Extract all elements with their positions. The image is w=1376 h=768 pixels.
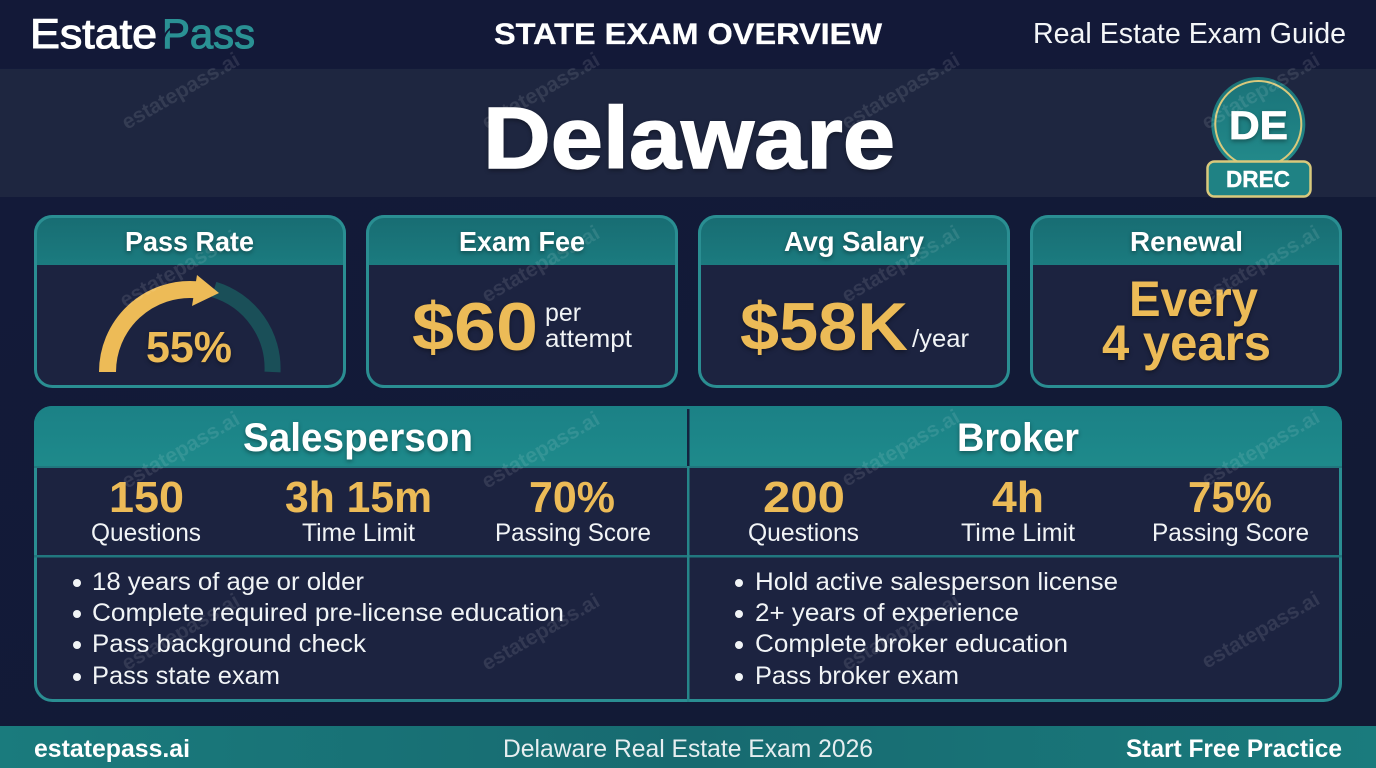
stat: time limit: 4h — [992, 473, 1044, 522]
stat: questions: 150 — [109, 473, 184, 522]
logo: EstatePass: Estate — [30, 10, 157, 57]
header title: STATE EXAM OVERVIEW — [494, 18, 883, 51]
card heading: Pass Rate — [125, 226, 254, 257]
column heading: Salesperson — [243, 416, 473, 460]
watermarks — [116, 48, 1324, 675]
renewal value: Every — [1129, 271, 1258, 327]
state badge: DE — [1229, 104, 1288, 148]
stat: time limit: Time Limit — [302, 519, 415, 547]
stat: passing score: Passing Score — [1152, 519, 1309, 547]
fee unit — [545, 299, 632, 353]
state badge — [1208, 77, 1310, 196]
watermarks: estatepass.ai — [1198, 48, 1324, 134]
watermarks: estatepass.ai — [478, 221, 604, 307]
watermarks: estatepass.ai — [838, 405, 964, 491]
card: Pass Rate — [34, 215, 346, 388]
comparison panel — [34, 406, 1342, 702]
watermarks: estatepass.ai — [838, 48, 964, 134]
stat: time limit: Time Limit — [961, 519, 1075, 547]
stat: passing score: Passing Score — [495, 519, 651, 547]
stat: questions: 200 — [763, 473, 845, 522]
stat: time limit — [961, 473, 1075, 547]
gauge value: 55% — [146, 323, 232, 372]
requirements list: Pass background check — [92, 630, 367, 658]
requirements list: Complete required pre-license education — [92, 599, 564, 627]
header bar — [0, 0, 1376, 68]
gauge: 55 percent arrow — [108, 275, 273, 372]
requirements list: Pass state exam — [92, 662, 280, 690]
state title: Delaware — [483, 90, 895, 187]
card heading: Avg Salary — [784, 226, 924, 257]
requirements list: 2+ years of experience — [755, 599, 1019, 627]
stat: passing score — [1152, 473, 1309, 547]
stat: time limit: 3h 15m — [285, 473, 432, 522]
fee unit: per — [545, 299, 581, 327]
watermarks: estatepass.ai — [478, 48, 604, 134]
card heading: Exam Fee — [459, 226, 585, 257]
stat: questions — [748, 473, 859, 547]
hero band — [0, 69, 1376, 197]
footer site name: estatepass.ai — [34, 735, 190, 763]
fee unit: attempt — [545, 325, 632, 353]
stat: questions — [91, 473, 201, 547]
requirements list: 18 years of age or older — [92, 568, 364, 596]
watermarks: estatepass.ai — [1198, 221, 1324, 307]
logo: EstatePass — [30, 10, 255, 57]
card heading: Renewal — [1130, 226, 1243, 257]
requirements list — [735, 568, 1118, 690]
watermarks: estatepass.ai — [118, 407, 244, 493]
column: Salesperson — [73, 416, 651, 690]
salary unit: /year — [912, 325, 969, 353]
stat: passing score: 75% — [1188, 473, 1272, 522]
card: Exam Fee — [366, 215, 678, 388]
salary value: $58K — [740, 289, 908, 365]
stat: passing score: 70% — [529, 473, 615, 522]
watermarks: estatepass.ai — [838, 589, 964, 675]
requirements list: Hold active salesperson license — [755, 568, 1118, 596]
footer bar — [0, 726, 1376, 768]
stat: passing score — [495, 473, 651, 547]
watermarks: estatepass.ai — [838, 221, 964, 307]
requirements list: Complete broker education — [755, 630, 1068, 658]
column heading: Broker — [957, 416, 1079, 460]
requirements list: Pass broker exam — [755, 662, 959, 690]
footer center text: Delaware Real Estate Exam 2026 — [503, 735, 873, 763]
watermarks: estatepass.ai — [478, 407, 604, 493]
requirements list — [73, 568, 564, 690]
footer call to action: Start Free Practice — [1126, 735, 1342, 763]
watermarks: estatepass.ai — [1198, 587, 1324, 673]
watermarks: estatepass.ai — [116, 226, 242, 312]
watermarks: estatepass.ai — [118, 48, 244, 134]
watermarks: estatepass.ai — [1198, 405, 1324, 491]
watermarks: estatepass.ai — [118, 589, 244, 675]
renewal value — [1102, 271, 1271, 371]
logo: EstatePass: Pass — [162, 10, 255, 57]
card: Renewal — [1030, 215, 1342, 388]
fee value: $60 — [412, 289, 538, 365]
stat: time limit — [285, 473, 432, 547]
watermarks: estatepass.ai — [478, 589, 604, 675]
card: Avg Salary — [698, 215, 1010, 388]
renewal value: 4 years — [1102, 315, 1271, 371]
column: Broker — [735, 416, 1309, 690]
state badge: DREC — [1226, 166, 1290, 192]
stat: questions: Questions — [91, 519, 201, 547]
header right label: Real Estate Exam Guide — [1033, 18, 1346, 50]
stat: questions: Questions — [748, 519, 859, 547]
